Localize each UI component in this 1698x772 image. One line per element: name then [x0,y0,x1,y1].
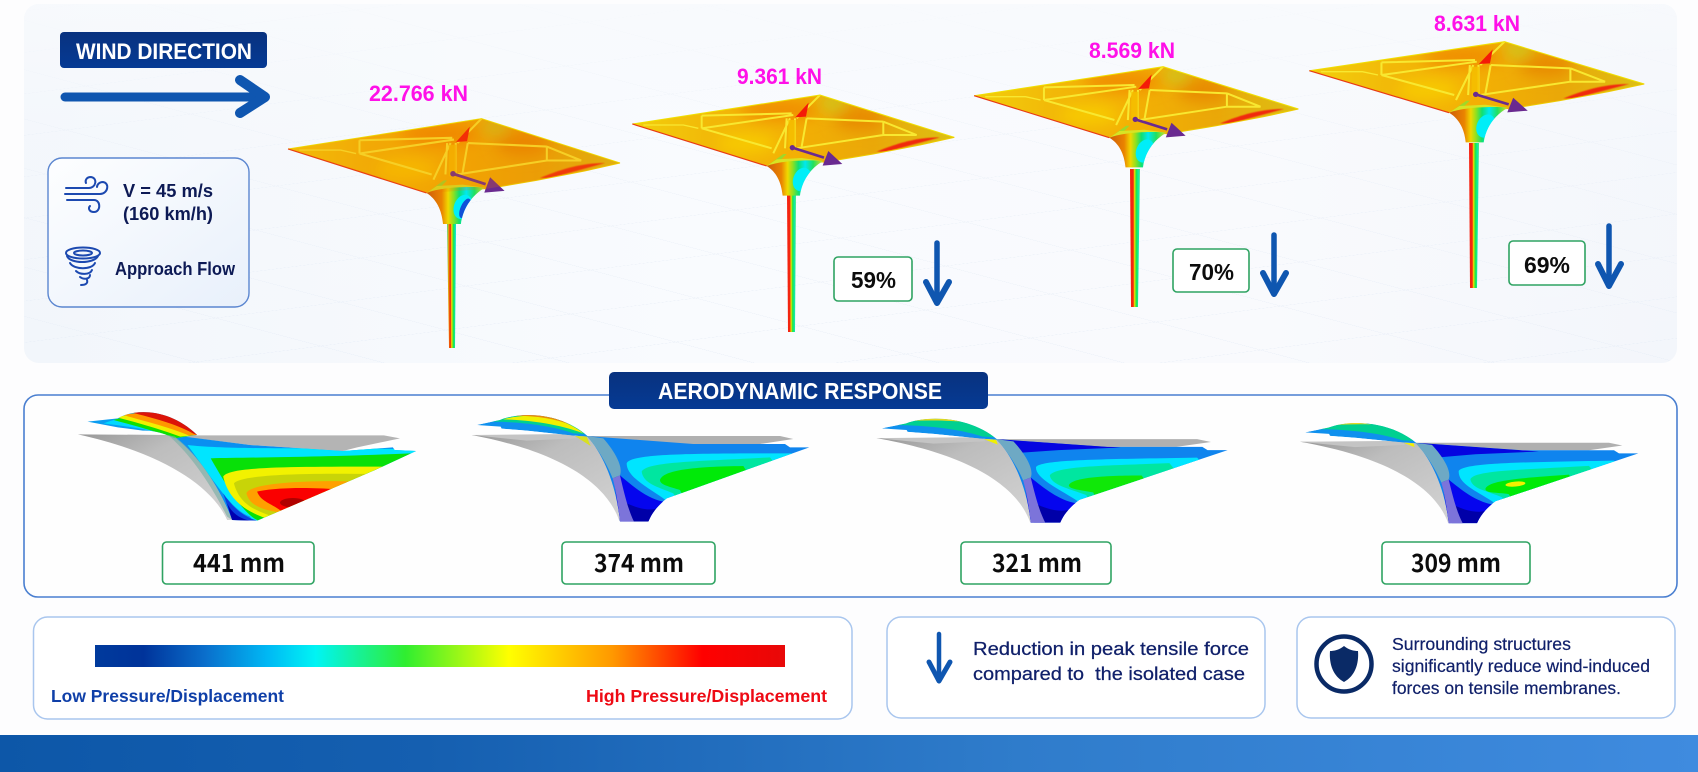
label: low: Low Pressure/Displacement [51,686,284,706]
heading: aerodynamic response: AERODYNAMIC RESPONSE [658,378,942,404]
footer band [0,735,1698,772]
arrow: wind direction [65,80,265,113]
value: 309 mm: 309 mm [1411,544,1501,580]
panel: wind load simulation [24,4,1677,363]
callout: 70 percent reduction: 70% [1189,259,1234,285]
callout: 59 percent reduction: 59% [851,267,896,293]
icon: shield [1316,636,1372,692]
callout: 59 percent reduction [834,257,912,301]
heading: wind direction [60,32,267,68]
value: 374 mm: 374 mm [594,544,684,580]
colour scale bar [95,645,785,667]
heading: aerodynamic response [609,372,988,409]
heading: wind direction: WIND DIRECTION [76,39,252,64]
value: 441 mm: 441 mm [193,544,285,580]
value: 321 mm [961,542,1111,584]
tent 1 isolated case [288,81,620,348]
text: reduction explanation: compared to the isolated case [973,663,1245,684]
icon: tornado [66,248,100,285]
icon: wind [65,177,107,212]
value: 441 mm [162,542,314,584]
callout: 70 percent reduction [1173,249,1249,292]
text: key finding [1392,634,1650,698]
panel: colour scale legend [34,617,852,719]
deformation 2: 374 mm [472,415,813,584]
tent 2 [632,64,954,332]
arrow: reduction [1598,226,1621,286]
icon: down arrow [929,634,950,681]
panel: flow conditions [48,158,249,307]
deformation 1: 441 mm [78,403,421,584]
value: 309 mm [1382,542,1530,584]
text: approach flow: Approach Flow [115,259,236,279]
text: wind speed [123,180,213,224]
text: wind speed: (160 km/h) [123,203,213,224]
value: 374 mm [562,542,715,584]
arrow: reduction [926,243,949,303]
text: key finding: forces on tensile membranes. [1392,678,1621,698]
callout: 69 percent reduction: 69% [1524,252,1570,278]
label: peak force 8.569 kN: 8.569 kN [1089,38,1175,63]
panel: reduction key [887,617,1265,718]
tent 3 [974,38,1298,307]
text: reduction explanation: Reduction in peak tensile force [973,638,1249,659]
label: high: High Pressure/Displacement [586,686,827,706]
value: 321 mm: 321 mm [992,544,1082,580]
label: peak force 22.766 kN: 22.766 kN [369,81,468,106]
tent 4 [1309,11,1644,288]
deformation 3: 321 mm [876,418,1232,584]
text: reduction explanation [973,638,1249,684]
panel: key finding [1297,617,1675,718]
label: peak force 9.361 kN: 9.361 kN [737,64,822,89]
deformation 4: 309 mm [1300,423,1642,584]
callout: 69 percent reduction [1509,241,1585,285]
label: peak force 8.631 kN: 8.631 kN [1434,11,1520,36]
text: key finding: Surrounding structures [1392,634,1571,654]
text: wind speed: V = 45 m/s [123,180,213,201]
text: key finding: significantly reduce wind-induced [1392,656,1650,676]
panel: aerodynamic response [24,372,1677,597]
arrow: reduction [1263,235,1286,294]
